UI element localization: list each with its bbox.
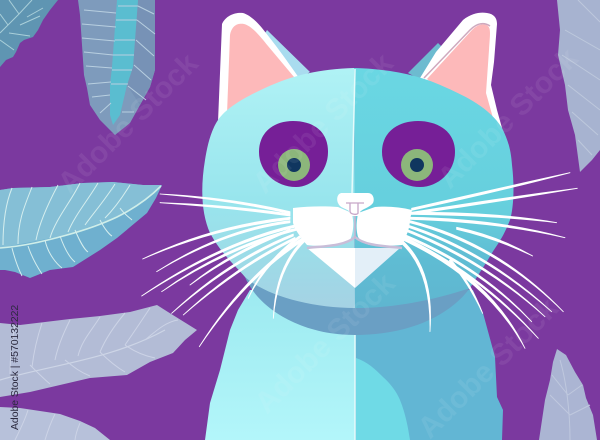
- leaf: top left: [0, 0, 58, 67]
- watermarks: Adobe Stock: [247, 47, 400, 200]
- right eye: [382, 121, 455, 187]
- leaf: top centre: [78, 0, 155, 135]
- left eye: [259, 121, 328, 187]
- left ear: [218, 13, 310, 122]
- right whiskers: [397, 173, 577, 348]
- leaf: middle left blue: [0, 182, 162, 278]
- stock id label: Adobe Stock | #570132222: [10, 305, 21, 430]
- right ear: [408, 13, 502, 128]
- leaf: lower left grey: [0, 305, 197, 397]
- collar: [245, 270, 470, 335]
- cat head: [202, 68, 513, 308]
- watermarks: Adobe Stock: [432, 42, 585, 195]
- watermarks: Adobe Stock: [52, 47, 205, 200]
- leaf: top right: [557, 0, 600, 172]
- cat body: [205, 290, 503, 440]
- nose: [337, 193, 374, 216]
- bib: [307, 248, 400, 288]
- leaf: bottom left: [0, 407, 110, 440]
- left whiskers: [142, 194, 312, 347]
- watermarks: Adobe Stock: [249, 267, 402, 420]
- muzzle: [293, 206, 412, 248]
- leaf: bottom right: [539, 349, 597, 440]
- cat: [142, 13, 577, 440]
